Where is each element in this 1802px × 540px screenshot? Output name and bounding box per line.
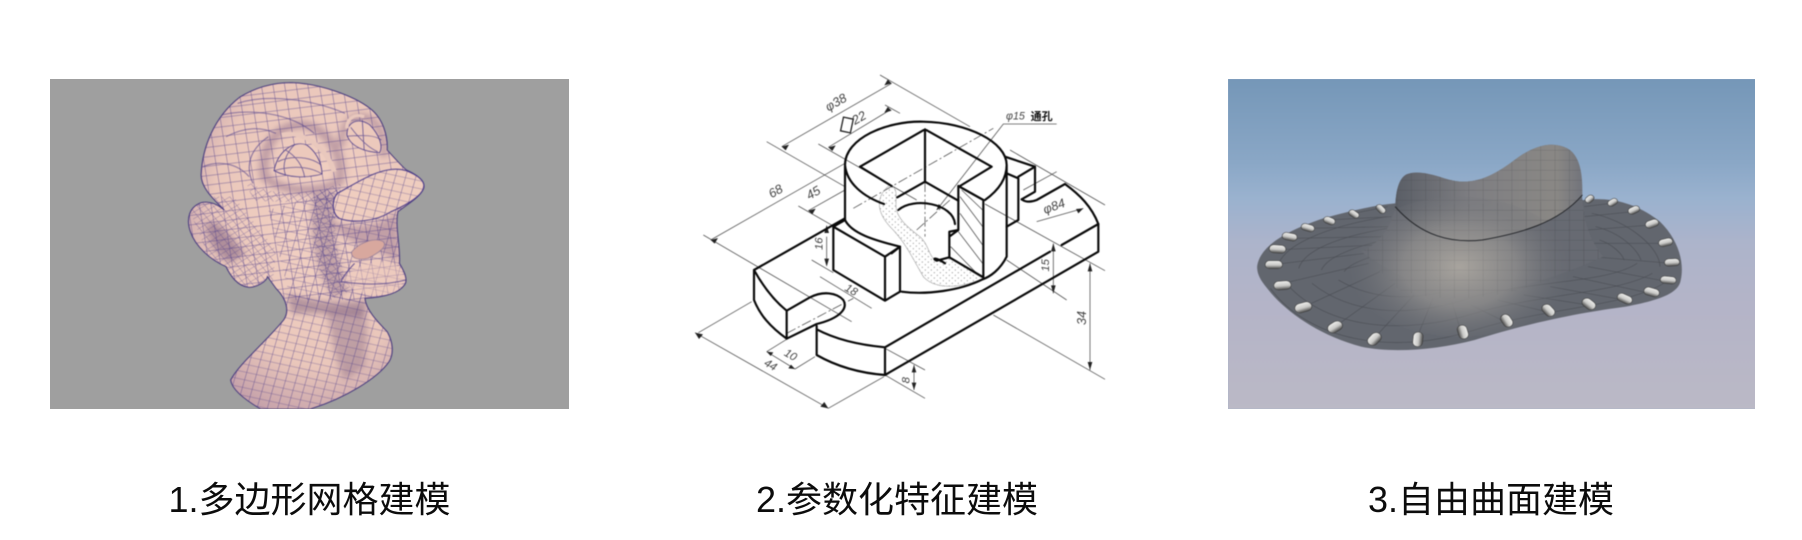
dimension labels: 16 [814,237,826,250]
seam line [1395,195,1582,241]
panel: polygon mesh modeling image [50,79,568,409]
object outlines [754,122,1098,375]
dimension labels: 通孔 [1031,109,1053,123]
panel: parametric feature modeling drawing [694,74,1106,410]
cylinder [845,122,1007,293]
surface crown [1346,145,1603,337]
dimension labels: 8 [900,376,912,383]
dimension labels: 68 [766,182,785,201]
lips [341,240,406,295]
dimension labels: 15 [1040,258,1052,272]
dimension lines [695,75,1105,408]
dimension labels [762,91,1089,383]
head mesh [189,83,405,409]
illustration: engineering isometric drawing [694,74,1106,410]
dimension labels: 34 [1075,311,1089,325]
caption: polygon mesh modeling: 1.多边形网格建模 [168,479,451,520]
rib block [833,220,900,301]
caption: free-form surface modeling: 3.自由曲面建模 [1368,479,1614,520]
dimension labels: 18 [842,282,860,299]
illustration: surface with pegs [1228,79,1755,409]
square hole [860,129,992,201]
caption: parametric feature modeling: 2.参数化特征建模 [756,479,1038,520]
dimension labels: φ84 [1041,196,1067,217]
dimension labels: φ15 [1006,110,1025,122]
section hatching [951,190,983,273]
illustration: wireframe head [187,82,426,409]
dimension labels: 22 [849,108,869,128]
pegs around the rim [1265,194,1679,347]
background sky gradient [1228,79,1756,409]
dimension labels: 45 [804,183,824,203]
dimension labels: φ38 [823,91,849,114]
nose [333,169,424,221]
dimension labels: 44 [762,357,779,374]
rear tab [1005,157,1035,227]
eyes and brows [274,116,381,177]
head silhouette [188,83,424,409]
head shading [207,116,399,380]
panel: free-form surface modeling image [1228,79,1755,409]
base plate [754,218,845,339]
surface brim [1257,199,1681,350]
stippled broken section [879,185,983,286]
dimension labels: 10 [782,347,799,364]
arrowheads [695,80,1092,408]
